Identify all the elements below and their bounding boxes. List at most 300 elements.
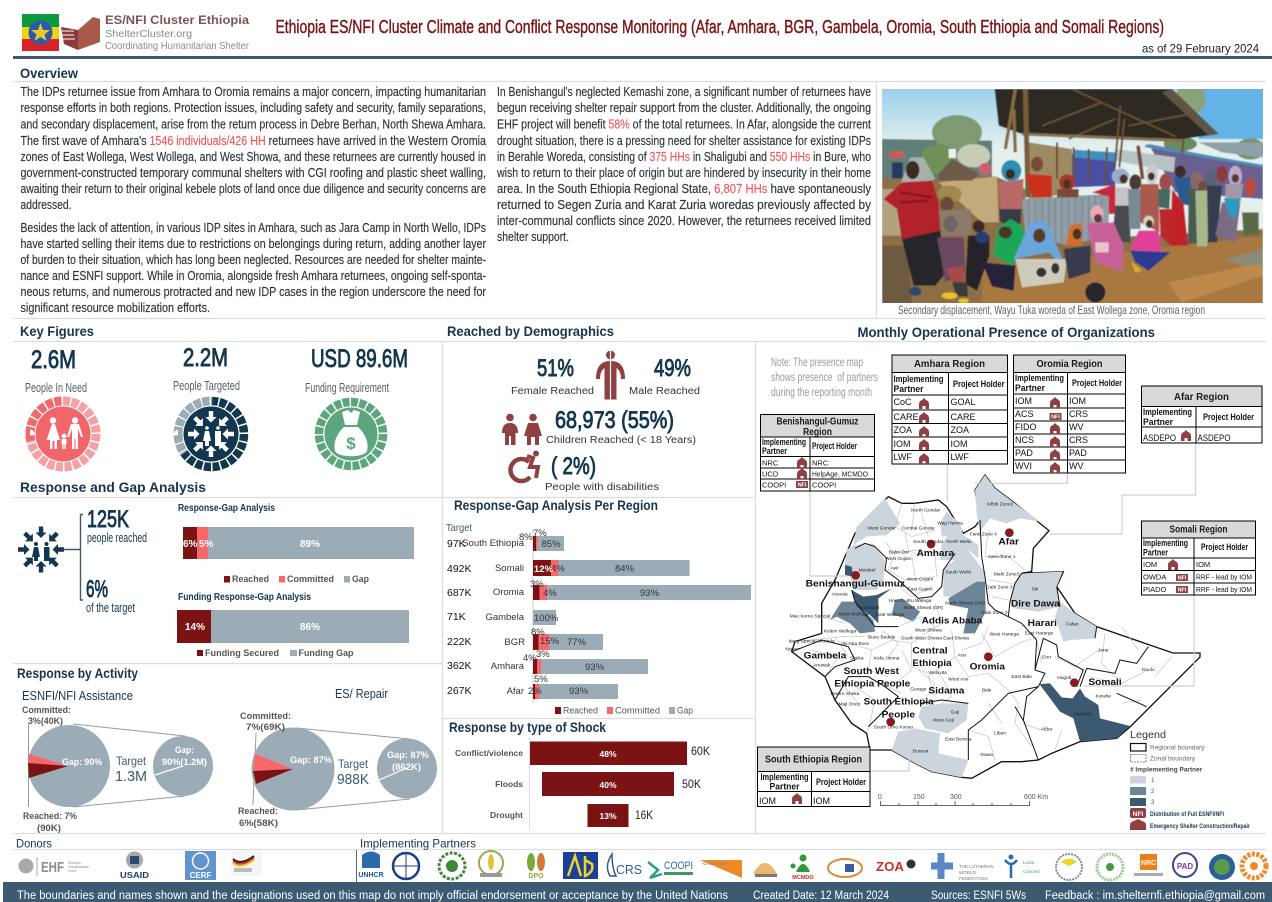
bar: conflict: 60K bbox=[691, 746, 710, 758]
pie chart: ESNFI/NFI bbox=[28, 724, 213, 807]
overview text column 1: significant resource mobilization efforts. bbox=[20, 301, 210, 315]
region names: Amhara bbox=[491, 661, 525, 672]
zone labels: Central Gondar bbox=[902, 526, 935, 532]
region names: Gambela bbox=[485, 612, 525, 623]
table: South Ethiopia: Project Holder bbox=[816, 777, 866, 787]
stacked bar: funding gap: 14% bbox=[185, 622, 205, 633]
logo: USAID bbox=[120, 852, 149, 880]
report date: as of 29 February 2024 bbox=[1142, 42, 1259, 56]
logo: EHF bbox=[18, 857, 89, 876]
table: Benishangul-Gumuz: Implementing bbox=[762, 437, 806, 447]
heading: response by activity: Response by Activity bbox=[17, 665, 138, 681]
table: Benishangul-Gumuz: Benishangul-Gumuz bbox=[776, 416, 858, 428]
logo: Action on Concern: Concern bbox=[1023, 869, 1041, 874]
legend: funding gap bbox=[197, 648, 354, 659]
logo: EHF: Fund bbox=[68, 869, 76, 873]
zone labels: Sheka bbox=[850, 655, 864, 661]
bar: floods bbox=[495, 772, 701, 796]
logo: partner seal ribbon bbox=[1056, 854, 1082, 880]
logo: partner sun bbox=[753, 863, 777, 877]
table: Oromia: CRS bbox=[1069, 409, 1088, 419]
zone labels: Dawa bbox=[980, 752, 993, 758]
map of Ethiopia bbox=[785, 443, 1200, 778]
label: male: Male Reached bbox=[629, 386, 700, 397]
shaded zones: two partners bbox=[830, 582, 986, 633]
bar values: 15% bbox=[540, 636, 560, 647]
map legend: Emergency Shelter Construction/Repair bbox=[1150, 824, 1251, 830]
number: people reached: 125K bbox=[87, 506, 129, 533]
map legend bbox=[1130, 730, 1251, 830]
logo: COOPI: COOPI bbox=[664, 860, 693, 872]
callout value: committed repair: 7%(69K) bbox=[246, 722, 285, 732]
bar values bbox=[519, 528, 660, 697]
zone labels: Gabi Zone 3 bbox=[981, 610, 1008, 616]
table: Oromia: PAD bbox=[1015, 448, 1033, 458]
legend: per region: Gap bbox=[677, 706, 693, 716]
heading: demographics: Reached by Demographics bbox=[447, 323, 614, 339]
map scale bar: 0 bbox=[878, 794, 882, 801]
overview text column 1: response efforts in both regions. Protection issues, including safety and security, family separations, bbox=[20, 101, 486, 115]
table: Amhara: GOAL bbox=[950, 397, 976, 407]
table: Somali: RRF - lead by IOM bbox=[1196, 585, 1252, 594]
table: Oromia: WV bbox=[1069, 461, 1084, 471]
region labels: Afar bbox=[998, 537, 1020, 547]
overview text column 1: of burden to their situation, which has long been neglected. Resources are needed for shelter mainte- bbox=[20, 253, 486, 267]
zone labels: Bale bbox=[982, 688, 992, 694]
bar values: 77% bbox=[567, 637, 587, 648]
zone labels: Awi bbox=[890, 565, 898, 571]
zone labels: Kefa Jimma bbox=[874, 655, 900, 661]
panel: implementing partners bbox=[356, 836, 1266, 882]
target values: 492K bbox=[447, 563, 472, 575]
overview text column 2: shelter support. bbox=[497, 230, 569, 244]
table: Somali bbox=[1142, 521, 1256, 595]
label: target column: Target bbox=[446, 522, 472, 534]
logo text: cluster name: ES/NFI Cluster Ethiopia bbox=[105, 13, 249, 27]
zone labels: Anuwak bbox=[813, 663, 831, 669]
target values: 267K bbox=[447, 685, 472, 697]
bar: drought bbox=[490, 804, 653, 827]
bar: drought: 13% bbox=[599, 811, 617, 821]
table: Amhara: ZOA bbox=[950, 425, 969, 435]
note: shows presence of partners bbox=[771, 372, 878, 384]
bar values: 4% bbox=[523, 653, 537, 664]
legend: per region: Committed bbox=[615, 706, 660, 716]
label: of the target: of the target bbox=[86, 601, 135, 615]
table: Benishangul-Gumuz: Partner bbox=[762, 446, 787, 456]
table: South Ethiopia: Partner bbox=[770, 782, 800, 792]
table: Oromia: WV bbox=[1069, 422, 1084, 432]
target values: 222K bbox=[447, 636, 472, 648]
logo: COOPI bbox=[648, 860, 693, 878]
bar values: 93% bbox=[569, 686, 589, 697]
logo: orange sunburst bbox=[1242, 854, 1266, 878]
zone labels: North Shewa (OR) bbox=[903, 605, 944, 611]
bar values: 5% bbox=[534, 674, 548, 685]
zone labels: North Gondar bbox=[911, 507, 941, 513]
overview text column 1: addressed. bbox=[20, 198, 72, 212]
zone labels: Siti bbox=[1032, 587, 1038, 593]
logo text: website: ShelterCluster.org bbox=[105, 28, 192, 40]
logo: partner green seal outline bbox=[1097, 854, 1123, 880]
table: Amhara: LWF bbox=[950, 452, 969, 462]
header rule bbox=[13, 56, 1272, 59]
table: Amhara bbox=[892, 355, 1008, 464]
logo: CRS: CRS bbox=[616, 862, 642, 877]
zone labels: West Gojam bbox=[885, 556, 912, 562]
region labels: South West bbox=[844, 666, 899, 676]
table: Oromia: Oromia Region bbox=[1036, 358, 1102, 370]
callout value: reached ESNFI: (90K) bbox=[37, 823, 61, 833]
stacked bar: response gap: 5% bbox=[199, 539, 214, 550]
region labels: People bbox=[882, 710, 915, 720]
legend: funding gap: Funding Secured bbox=[205, 648, 279, 659]
zone labels: South Omo Konso bbox=[874, 725, 913, 731]
zone labels: Gurage bbox=[910, 687, 927, 693]
stacked bar: response gap: 89% bbox=[300, 539, 320, 550]
partner location dots bbox=[851, 528, 1079, 726]
zone labels: Jarar bbox=[1098, 648, 1109, 654]
bar values: 12% bbox=[534, 564, 554, 575]
table: Oromia: IOM bbox=[1069, 396, 1086, 406]
subheading: ES repair: ES/ Repair bbox=[335, 687, 388, 701]
roof bbox=[995, 89, 1219, 139]
overview heading: Overview bbox=[20, 65, 78, 81]
table: Benishangul-Gumuz: UCD bbox=[762, 470, 779, 478]
icon: money bag in green ring bbox=[319, 402, 383, 466]
map legend: NFI bbox=[1133, 811, 1143, 818]
zone labels: Fanti Zone 4 bbox=[970, 531, 997, 537]
footer date: Created Date: 12 March 2024 bbox=[753, 890, 890, 902]
region labels: South Ethiopia bbox=[864, 696, 935, 706]
region labels: Amhara bbox=[917, 548, 955, 558]
logo: Lutheran World Federation bbox=[931, 853, 994, 881]
table: Benishangul-Gumuz: COOPI bbox=[812, 480, 836, 490]
region labels: Dire Dawa bbox=[1011, 599, 1061, 609]
region labels: Gambela bbox=[804, 650, 847, 660]
overview text column 2 bbox=[496, 85, 872, 244]
bar: drought: 16K bbox=[635, 810, 653, 822]
table: South Ethiopia: South Ethiopia Region bbox=[765, 754, 862, 766]
logo: EHF: EHF bbox=[41, 859, 64, 876]
logo: NRC bbox=[1134, 854, 1163, 876]
table: Amhara: IOM bbox=[894, 439, 910, 449]
footer sources: Sources: ESNFI 5Ws bbox=[931, 890, 1026, 902]
table: Benishangul-Gumuz: COOPI bbox=[762, 480, 786, 490]
panel: operational presence bbox=[758, 324, 1262, 830]
table: Oromia: WVI bbox=[1015, 461, 1032, 471]
region labels: Sidama bbox=[928, 685, 965, 695]
table: Afar: Implementing bbox=[1143, 407, 1192, 417]
table: Oromia: FIDO bbox=[1015, 422, 1036, 432]
overview text column 1: government-constructed temporary communal shelters with CGI roofing and plastic sheet walling, bbox=[20, 166, 486, 180]
legend: response gap bbox=[224, 574, 369, 585]
bar: floods: 50K bbox=[682, 779, 701, 791]
bar values: 100% bbox=[534, 613, 559, 624]
zone labels: Kamashi bbox=[861, 605, 879, 611]
logo: PAD: PAD bbox=[1177, 862, 1193, 871]
number: people in need: 2.6M bbox=[31, 346, 76, 374]
logo: PAD bbox=[1173, 853, 1197, 877]
zone labels: North Shewa (AM) bbox=[945, 601, 985, 607]
table: Benishangul-Gumuz: NFI bbox=[798, 482, 807, 488]
table: Amhara: CARE bbox=[894, 412, 919, 422]
zone labels: East Wollega bbox=[876, 612, 904, 618]
zone labels: South Gondar bbox=[913, 539, 944, 545]
target values: 71K bbox=[447, 611, 466, 623]
zone labels: West Arsi bbox=[948, 676, 968, 682]
shaded zones: one partner bbox=[845, 475, 1097, 777]
panel: donors bbox=[16, 836, 262, 880]
zone labels: Kelem Wellega bbox=[824, 628, 857, 634]
pie chart: ES repair: Gap: 87% bbox=[387, 750, 429, 760]
stacked bar: response gap: 6% bbox=[183, 539, 198, 550]
zone labels: South West Shewa East Shewa bbox=[901, 635, 969, 641]
zone labels: Wag Hamra bbox=[937, 520, 963, 526]
zone labels: West Wollega bbox=[839, 611, 869, 617]
region labels: Oromia bbox=[970, 661, 1006, 671]
logo: UNHCR: UNHCR bbox=[358, 872, 384, 879]
zone labels: Kilbiti Zone2 bbox=[987, 502, 1014, 508]
logo: ZOA bbox=[876, 859, 916, 874]
stacked bar: response gap bbox=[183, 527, 414, 559]
logo: Lutheran World Federation: THE LUTHERAN bbox=[959, 864, 994, 869]
bar values: 3% bbox=[536, 649, 550, 660]
pie chart: ES repair: (862K) bbox=[392, 762, 421, 772]
table: Afar: Project Holder bbox=[1203, 412, 1254, 422]
bars: gap bbox=[533, 536, 751, 699]
panel: response by activity bbox=[17, 665, 437, 833]
corrugated wall bbox=[1022, 194, 1109, 246]
icon: shelter cluster book logo bbox=[61, 17, 100, 50]
heading: response and gap analysis: Response and Gap Analysis bbox=[20, 479, 206, 495]
overview text column 1: Besides the lack of attention, in various IDP sites in Amhara, such as Jara Camp in North Wello, IDPs bbox=[20, 221, 486, 235]
leader lines from tables to map bbox=[810, 443, 1196, 771]
zone labels: Shabelle bbox=[1073, 712, 1092, 718]
table: Somali: Implementing bbox=[1143, 538, 1188, 548]
panel: response by type of shock bbox=[449, 719, 710, 830]
table: Benishangul-Gumuz: Region bbox=[803, 426, 832, 438]
people back row bbox=[1001, 160, 1021, 181]
table: Oromia: IOM bbox=[1015, 396, 1032, 406]
region labels: Ethiopia People bbox=[834, 679, 910, 689]
region names bbox=[462, 538, 525, 697]
overview text column 2: in Berahle Woreda, consisting of 375 HHs in Shaligubi and 550 HHs in Bure, who bbox=[497, 150, 871, 164]
label: people reached: people reached bbox=[87, 531, 147, 545]
header logos bbox=[22, 13, 250, 52]
overview text column 2: wish to return to their place of origin but are hindered by insecurity in their home bbox=[496, 166, 871, 180]
legend: response gap: Gap bbox=[352, 574, 369, 585]
regional boundaries bbox=[792, 520, 1148, 760]
logo: MCMDO: MCMDO bbox=[792, 875, 814, 881]
bar: conflict bbox=[455, 742, 710, 765]
pie chart: ESNFI/NFI: Gap: bbox=[175, 745, 194, 755]
panel: key figures bbox=[20, 323, 408, 467]
zone labels: Wolayita bbox=[928, 670, 947, 676]
legend: response gap: Committed bbox=[287, 574, 334, 585]
map scale bar: 300 bbox=[950, 794, 962, 801]
logo: USAID: USAID bbox=[120, 870, 149, 880]
bars: reached bbox=[533, 536, 551, 699]
logo: Action on Concern bbox=[1005, 854, 1041, 878]
logo: CERF bbox=[185, 851, 216, 880]
footer disclaimer: The boundaries and names shown and the designations used on this map do not imply official endorsement or acceptance by the United Nations bbox=[17, 890, 728, 902]
target: ESNFI: Target bbox=[116, 754, 147, 768]
table: South Ethiopia: IOM bbox=[813, 796, 830, 806]
map scale bar: 600 Km bbox=[1024, 794, 1048, 801]
bar values: 85% bbox=[542, 539, 561, 550]
chart title: funding gap: Funding Response-Gap Analysis bbox=[178, 591, 311, 603]
people front row bbox=[900, 157, 935, 186]
table: Amhara: Amhara Region bbox=[914, 358, 985, 370]
zone labels: North Wello bbox=[946, 539, 972, 545]
overview text column 1: have started selling their items due to restrictions on belongings during return, adding another layer bbox=[20, 237, 486, 251]
bar values: 93% bbox=[640, 588, 660, 599]
note bbox=[771, 357, 878, 399]
table: Oromia: Implementing bbox=[1015, 373, 1064, 383]
legend: response gap: Reached bbox=[232, 574, 269, 585]
table: Oromia: CRS bbox=[1069, 435, 1088, 445]
overview text column 2: begun receiving shelter repair support from the cluster. Additionally, the ongoing bbox=[497, 101, 871, 115]
bar: conflict: Conflict/violence bbox=[455, 748, 523, 758]
table: Amhara: LWF bbox=[894, 452, 912, 462]
target values: 362K bbox=[447, 660, 472, 672]
table: South Ethiopia: Implementing bbox=[760, 772, 808, 782]
legend: per region bbox=[555, 706, 693, 716]
number: female: 51% bbox=[537, 355, 574, 382]
overview text column 1: The first wave of Amhara's 1546 individuals/426 HH returnees have arrived in the Western Oromia bbox=[20, 134, 486, 148]
bar values: 4% bbox=[543, 588, 557, 599]
icon: family in red ring bbox=[30, 401, 96, 467]
region names: Somali bbox=[495, 563, 524, 574]
shaded zones: three partners bbox=[845, 565, 1130, 742]
table: South Ethiopia: IOM bbox=[759, 796, 776, 806]
bar: floods: 40% bbox=[599, 780, 617, 790]
note: during the reporting month bbox=[771, 387, 872, 399]
region names: South Ethiopia bbox=[462, 538, 525, 549]
logo: CERF: CERF bbox=[190, 871, 212, 880]
logo: UNHCR bbox=[358, 852, 384, 879]
subheading: ESNFI/NFI: ESNFI/NFI Assistance bbox=[22, 689, 133, 703]
map legend: Legend bbox=[1130, 730, 1166, 741]
map scale bar: 150 bbox=[913, 794, 925, 801]
bar values: 8% bbox=[531, 627, 545, 638]
target values: 97K bbox=[447, 538, 466, 550]
label: people in need: People In Need bbox=[25, 381, 87, 395]
target: repair: 988K bbox=[337, 771, 369, 788]
pie chart: ES repair bbox=[252, 728, 437, 810]
table: Oromia: NFI bbox=[1051, 414, 1060, 420]
zone labels: Buno Bedele bbox=[868, 634, 896, 640]
label: funding requirement: Funding Requirement bbox=[305, 381, 389, 395]
table: Oromia: Partner bbox=[1015, 383, 1045, 393]
overview text column 1: awaiting their return to their original kebele plots of land once due diligence and security concerns are bbox=[20, 182, 486, 196]
overview text column 2: In Benishangul's neglected Kemashi zone, a significant number of returnees have bbox=[497, 85, 871, 99]
table: Afar bbox=[1142, 386, 1262, 443]
heading: operational presence: Monthly Operational Presence of Organizations bbox=[858, 324, 1155, 340]
bar: drought: Drought bbox=[490, 810, 523, 820]
overview text column 2: EHF project will benefit 58% of the total returnees. In Afar, alongside the current bbox=[497, 118, 871, 132]
icon: arrows and people in dark ring bbox=[178, 401, 244, 467]
table: Amhara: IOM bbox=[950, 439, 968, 449]
table: Benishangul-Gumuz bbox=[760, 414, 874, 491]
region labels: Somali bbox=[1088, 677, 1122, 687]
zone labels: Mahi Zone3 bbox=[994, 572, 1020, 578]
callout value: committed ESNFI: 3%(40K) bbox=[28, 716, 63, 726]
logo: partner blue green seal bbox=[1209, 854, 1235, 880]
map legend: 1 bbox=[1151, 778, 1155, 784]
logo: Action on Concern: Local bbox=[1023, 860, 1034, 865]
zone labels: West Shewa bbox=[915, 627, 942, 633]
pie chart: ESNFI/NFI: Gap: 90% bbox=[62, 757, 102, 767]
zone labels: Bahir Dar bbox=[889, 549, 910, 555]
target: ESNFI bbox=[115, 754, 147, 785]
overview text column 1: neous returns, and numerous protracted and new IDP cases in the region underscore the need for bbox=[20, 285, 486, 299]
table: Oromia: NCS bbox=[1015, 435, 1034, 445]
legend: per region: Reached bbox=[563, 706, 598, 716]
stacked bar: funding gap: 86% bbox=[300, 622, 320, 633]
table: Oromia bbox=[1014, 355, 1126, 473]
overview text column 2: drought situation, there is a pressing need for shelter assistance for existing IDPs bbox=[497, 134, 871, 148]
axis bbox=[532, 530, 534, 703]
table: Somali: IOM bbox=[1196, 560, 1210, 569]
bracket connector bbox=[63, 514, 83, 600]
map scale bar bbox=[878, 794, 1048, 806]
zone labels: Nuwer bbox=[785, 646, 800, 652]
callout: reached repair: Reached: bbox=[238, 806, 278, 816]
zone labels: Guji bbox=[951, 709, 959, 715]
overview text column 1: zones of East Wollega, West Wollega, and West Showa, and these returnees are currently housed in bbox=[20, 150, 486, 164]
zone labels: Gabi Zone 3 bbox=[986, 585, 1013, 591]
zone labels: East Hararge bbox=[1025, 630, 1054, 636]
zone labels: Afder bbox=[1041, 727, 1053, 733]
map legend: 2 bbox=[1151, 789, 1155, 795]
table: Afar: Partner bbox=[1143, 417, 1173, 427]
label: people targeted: People Targeted bbox=[173, 379, 240, 393]
logo: German humanitarian aid bbox=[231, 851, 262, 876]
bar: floods: Floods bbox=[495, 779, 523, 789]
logo: oval partner bbox=[828, 859, 862, 877]
zone labels: Maji Ones bbox=[838, 702, 861, 708]
number: percent of target: 6% bbox=[86, 576, 108, 603]
heading: shock: Response by type of Shock bbox=[449, 719, 606, 735]
bar values: 3% bbox=[530, 579, 544, 590]
logo: partner green seal bbox=[439, 853, 465, 879]
legend: funding gap: Funding Gap bbox=[298, 648, 354, 659]
logo: ANE bbox=[563, 852, 598, 879]
icon: wheelchair bbox=[510, 450, 539, 481]
zone labels: Illu Aba Bora bbox=[841, 641, 869, 647]
zone labels: East Bale bbox=[1011, 674, 1032, 680]
zonal boundaries bbox=[795, 503, 1172, 760]
bar values: 84% bbox=[615, 564, 635, 574]
table: Afar: ASDEPO bbox=[1143, 433, 1176, 443]
bar values: 2% bbox=[528, 686, 542, 697]
stacked bar: funding gap bbox=[177, 610, 409, 643]
chart title: response gap: Response-Gap Analysis bbox=[178, 502, 275, 514]
region labels: Benishangul-Gumuz bbox=[806, 579, 906, 589]
callout value: reached repair: 6%(58K) bbox=[239, 818, 278, 828]
overview text column 1 bbox=[20, 85, 486, 315]
table: Somali: Somali Region bbox=[1170, 524, 1228, 536]
table: Oromia: ACS bbox=[1015, 409, 1034, 419]
logo: partner yellow wreath bbox=[479, 851, 503, 877]
target values bbox=[447, 538, 472, 697]
table: South Ethiopia bbox=[758, 747, 870, 806]
heading: per region: Response-Gap Analysis Per Region bbox=[454, 497, 658, 513]
bar values: 93% bbox=[585, 662, 605, 673]
axis: shock bbox=[528, 738, 530, 830]
